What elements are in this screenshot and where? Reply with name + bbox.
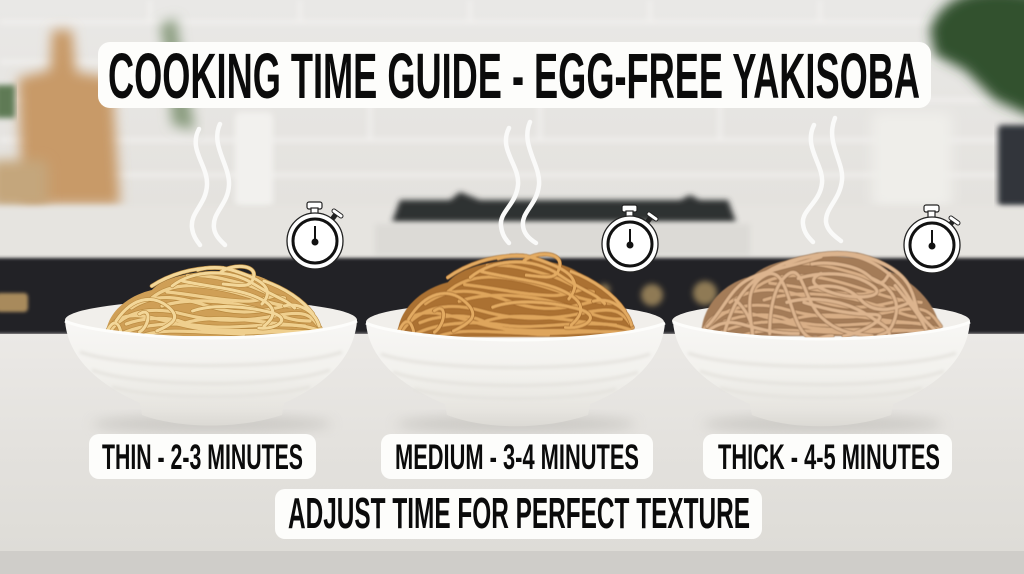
steam: thick bowl bbox=[803, 118, 842, 242]
bowl shadow bbox=[396, 415, 636, 433]
bowl body bbox=[366, 323, 665, 426]
bowl body bbox=[65, 321, 357, 426]
gold handle bbox=[0, 293, 28, 312]
counter edge bbox=[0, 551, 1024, 574]
footer note bbox=[275, 489, 762, 539]
bowl 3: thick noodles bbox=[672, 253, 970, 433]
label: medium bbox=[381, 434, 653, 479]
label: thin: THIN - 2-3 MINUTES bbox=[102, 438, 303, 477]
thick noodles bbox=[701, 253, 941, 339]
steam: thin bowl bbox=[192, 124, 229, 245]
bowl 2: medium noodles bbox=[366, 254, 665, 433]
bowl interior bbox=[366, 302, 664, 342]
bowl body bbox=[673, 322, 970, 426]
blurred cutting board bbox=[18, 30, 120, 205]
blurred dark object right bbox=[998, 125, 1024, 207]
blurred left leaves bbox=[0, 85, 15, 118]
dark cabinets bbox=[0, 258, 1024, 334]
stopwatch: thick bbox=[904, 205, 960, 273]
bowl 1: thin noodles bbox=[65, 266, 357, 433]
blurred white vase bbox=[235, 112, 273, 207]
bowl interior bbox=[65, 300, 357, 340]
bowl shadow bbox=[92, 415, 332, 433]
back counter bbox=[0, 206, 1024, 258]
medium noodles bbox=[397, 254, 633, 337]
front counter bbox=[0, 334, 1024, 552]
stopwatch: thin bbox=[287, 202, 343, 269]
label: medium: MEDIUM - 3-4 MINUTES bbox=[395, 438, 639, 477]
blurred basket bbox=[0, 160, 48, 208]
blurred white jar bbox=[872, 112, 952, 208]
bowl shadow bbox=[703, 415, 943, 433]
stove bbox=[392, 192, 736, 222]
stopwatch: medium bbox=[602, 205, 658, 272]
blurred small plant bbox=[160, 18, 195, 130]
gold knobs bbox=[598, 281, 717, 306]
steam: medium bowl bbox=[501, 122, 539, 243]
thin noodles bbox=[106, 266, 320, 336]
label: thin bbox=[89, 434, 316, 479]
blurred plant bbox=[930, 0, 1024, 120]
label: thick bbox=[703, 434, 952, 479]
bowl interior bbox=[672, 301, 970, 341]
